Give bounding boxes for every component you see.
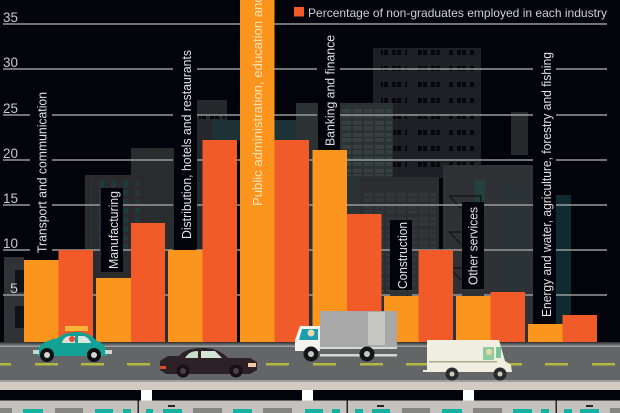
y axis labels: 20 bbox=[3, 145, 18, 161]
y axis labels: 5 bbox=[10, 280, 18, 296]
label backing boxes bbox=[33, 33, 556, 318]
van: white delivery van bbox=[423, 340, 512, 380]
bar labels: Distribution, hotels and restaurants bbox=[179, 50, 194, 239]
bar labels: Transport and communication bbox=[34, 92, 50, 253]
bar labels: Energy and water, agriculture, forestry and fishing bbox=[539, 52, 554, 317]
bar labels: Banking and finance bbox=[322, 35, 338, 146]
car: teal beetle bbox=[33, 326, 112, 362]
y axis labels: 10 bbox=[3, 235, 18, 251]
bar labels bbox=[34, 0, 554, 317]
car: dark sedan bbox=[160, 348, 257, 378]
y axis labels: 35 bbox=[3, 9, 18, 25]
legend: Percentage of non-graduates employed in each industry bbox=[308, 6, 607, 20]
train track and train bbox=[0, 382, 620, 413]
y axis labels: 30 bbox=[3, 54, 18, 70]
y axis labels bbox=[3, 9, 18, 296]
bar labels: Manufacturing bbox=[106, 191, 121, 269]
road bbox=[0, 342, 620, 382]
truck: grey box truck bbox=[295, 311, 397, 362]
y axis labels: 15 bbox=[3, 190, 18, 206]
bar labels: Construction bbox=[395, 222, 410, 289]
bar labels: Other services bbox=[466, 207, 480, 285]
bar chart bbox=[24, 0, 597, 343]
city skyline bbox=[4, 48, 571, 343]
y axis labels: 25 bbox=[3, 100, 18, 116]
grid lines bbox=[3, 24, 607, 295]
